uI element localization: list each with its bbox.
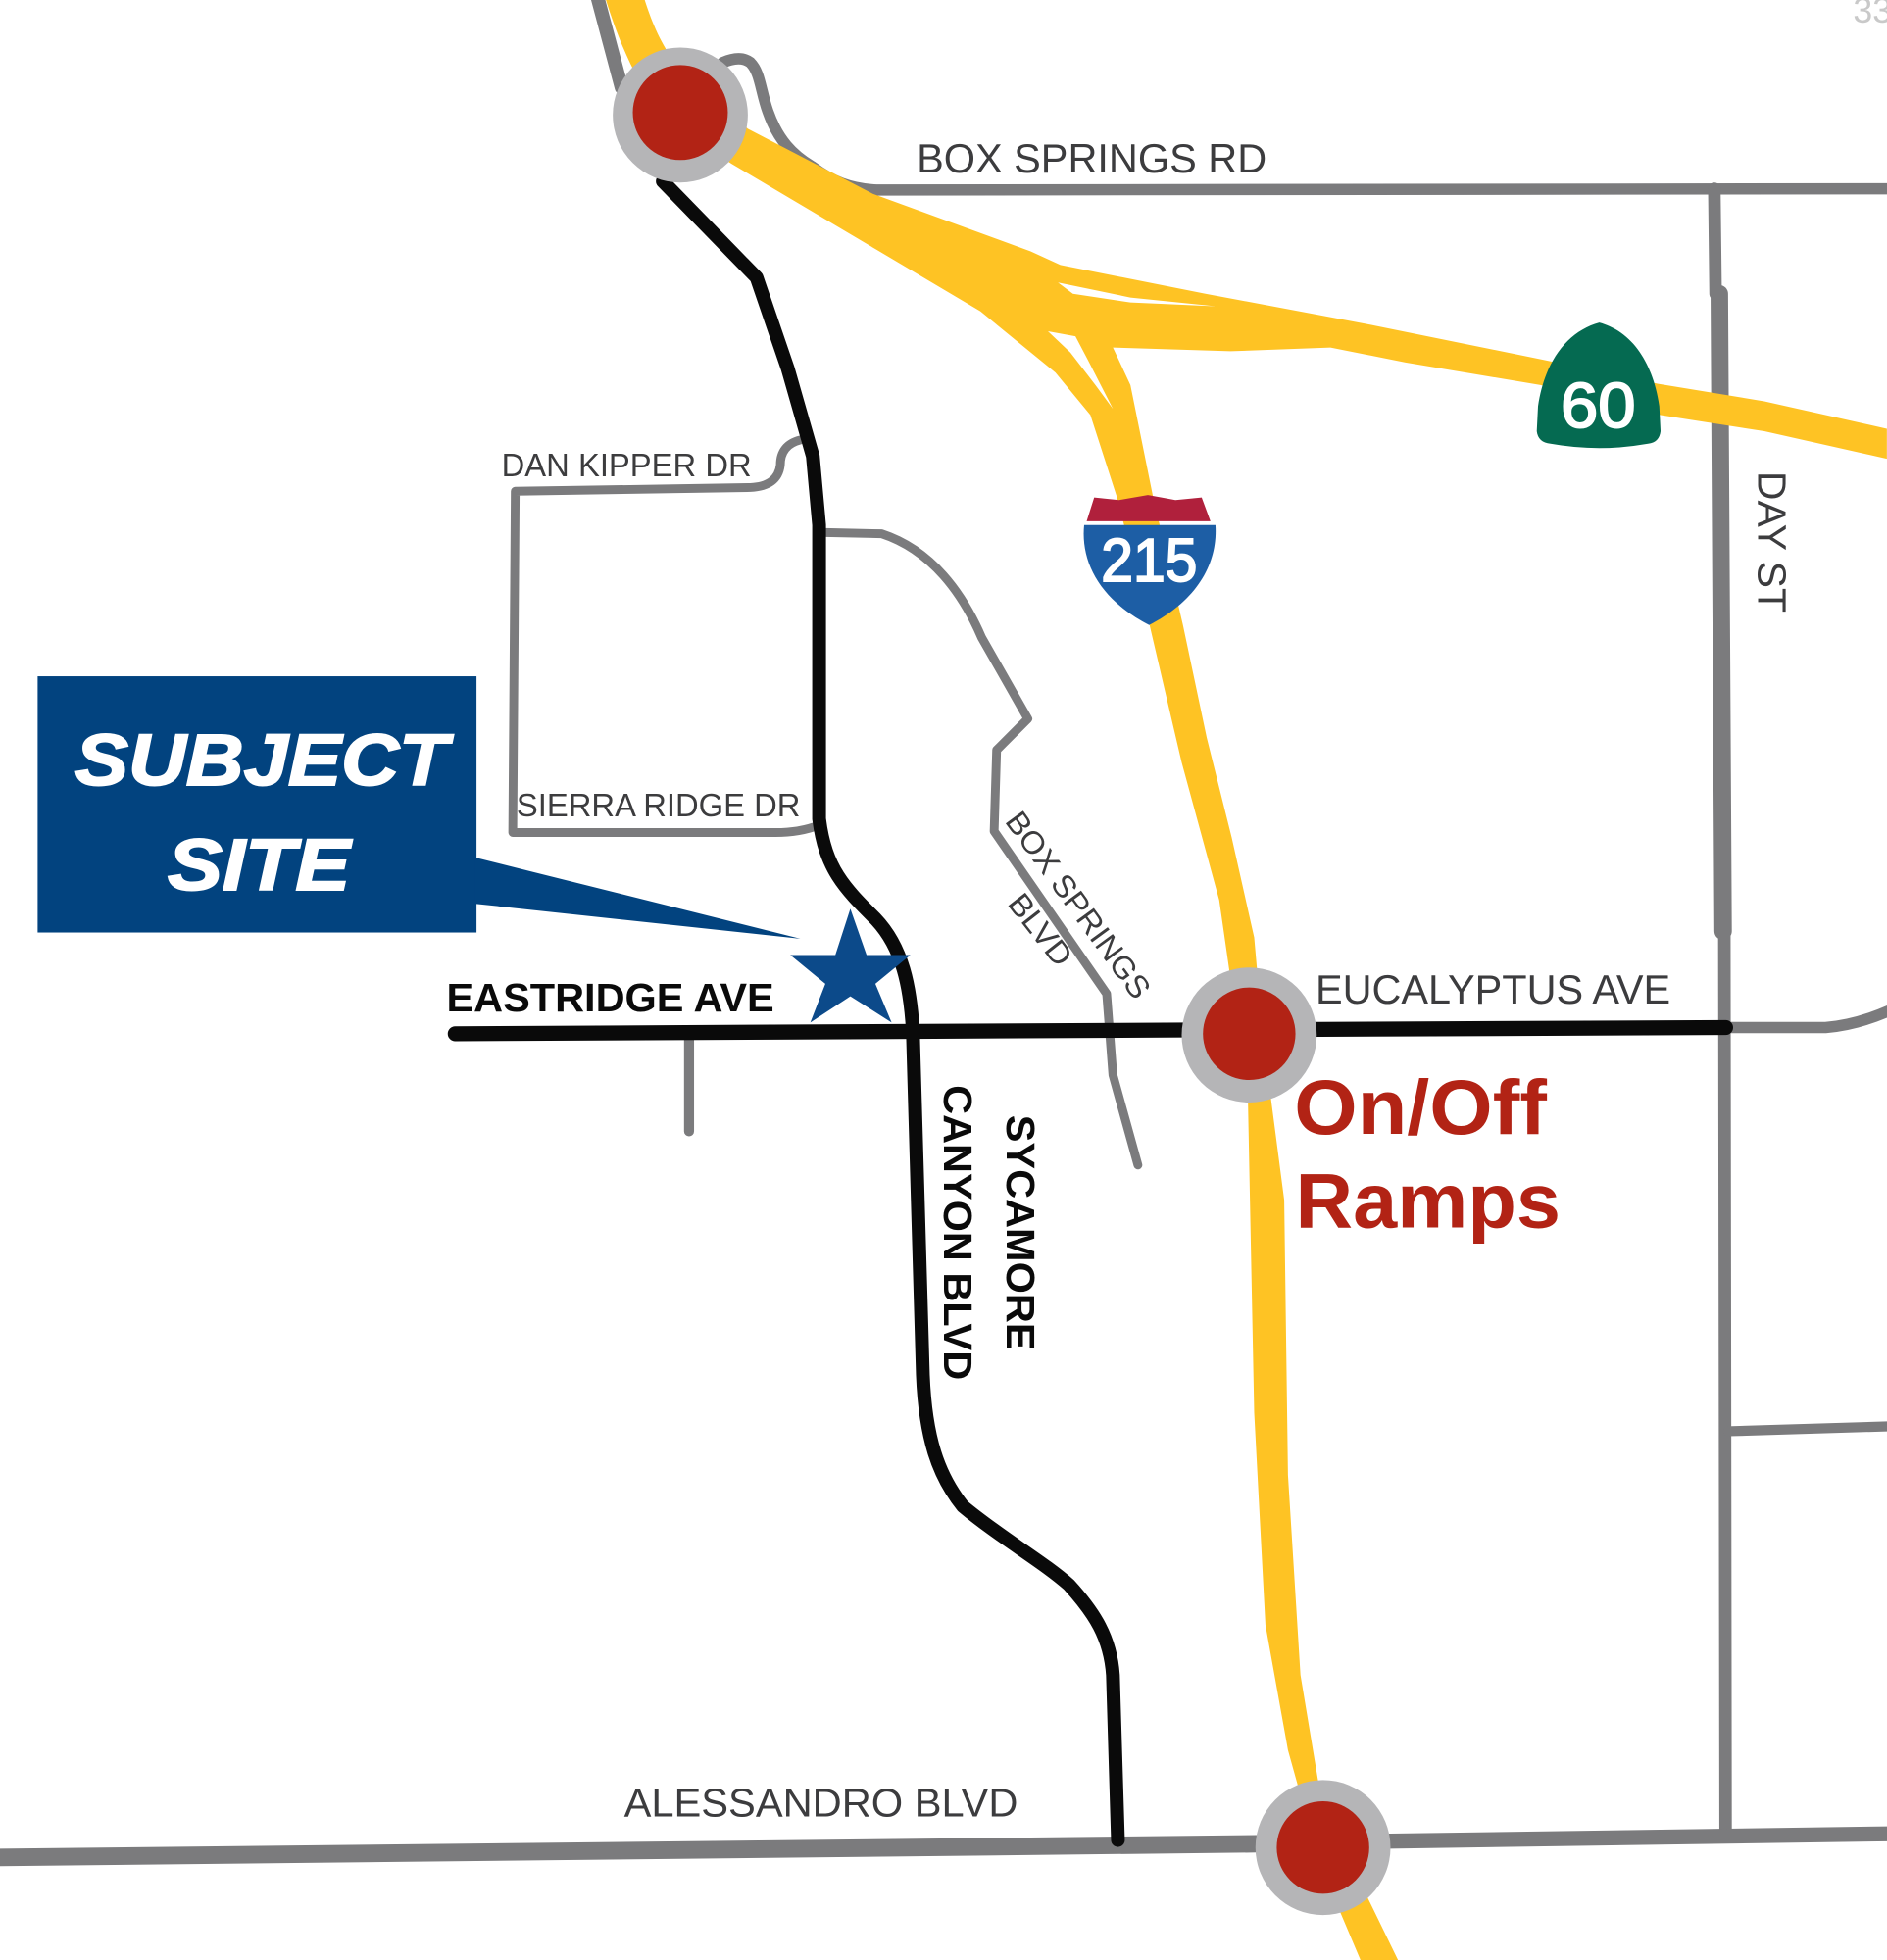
- shield: I-215: [1084, 495, 1216, 625]
- label: Alessandro Blvd: ALESSANDRO BLVD: [624, 1780, 1018, 1825]
- interchange marker: Alessandro: [1256, 1780, 1390, 1915]
- label: Sierra Ridge Dr: SIERRA RIDGE DR: [517, 788, 800, 824]
- label: On/Off Ramps: [1294, 1063, 1561, 1245]
- callout: subject site: SITE: [168, 824, 353, 906]
- label: Box Springs Blvd: BLVD: [1001, 886, 1080, 973]
- label: Sycamore Canyon Blvd: SYCAMORE: [998, 1115, 1043, 1350]
- label: Sycamore Canyon Blvd: [935, 1085, 1043, 1380]
- label: Day St: DAY ST: [1749, 471, 1794, 612]
- label: Eastridge Ave: EASTRIDGE AVE: [446, 975, 774, 1020]
- label: Dan Kipper Dr: DAN KIPPER DR: [502, 448, 752, 484]
- callout: subject site: SUBJECT: [75, 719, 454, 801]
- callout: subject site: [37, 676, 800, 939]
- major black roads: [455, 181, 1725, 1840]
- interchange marker: north: [613, 47, 748, 182]
- label: On/Off Ramps: Ramps: [1296, 1157, 1561, 1245]
- icon: site star: [790, 908, 911, 1022]
- shield: I-215: 215: [1101, 526, 1197, 595]
- label: On/Off Ramps: On/Off: [1294, 1063, 1548, 1151]
- label: Eucalyptus Ave: EUCALYPTUS AVE: [1316, 966, 1670, 1012]
- label: Box Springs Rd: BOX SPRINGS RD: [917, 135, 1266, 181]
- label: Sycamore Canyon Blvd: CANYON BLVD: [935, 1085, 980, 1380]
- interchange marker: Eucalyptus: [1181, 967, 1316, 1102]
- label: Box Springs Blvd: BOX SPRINGS: [999, 805, 1158, 1005]
- shield: SR-60: [1537, 322, 1661, 448]
- freeway: I-215 and SR-60: [604, 0, 1887, 1960]
- shield: SR-60: 60: [1561, 369, 1635, 441]
